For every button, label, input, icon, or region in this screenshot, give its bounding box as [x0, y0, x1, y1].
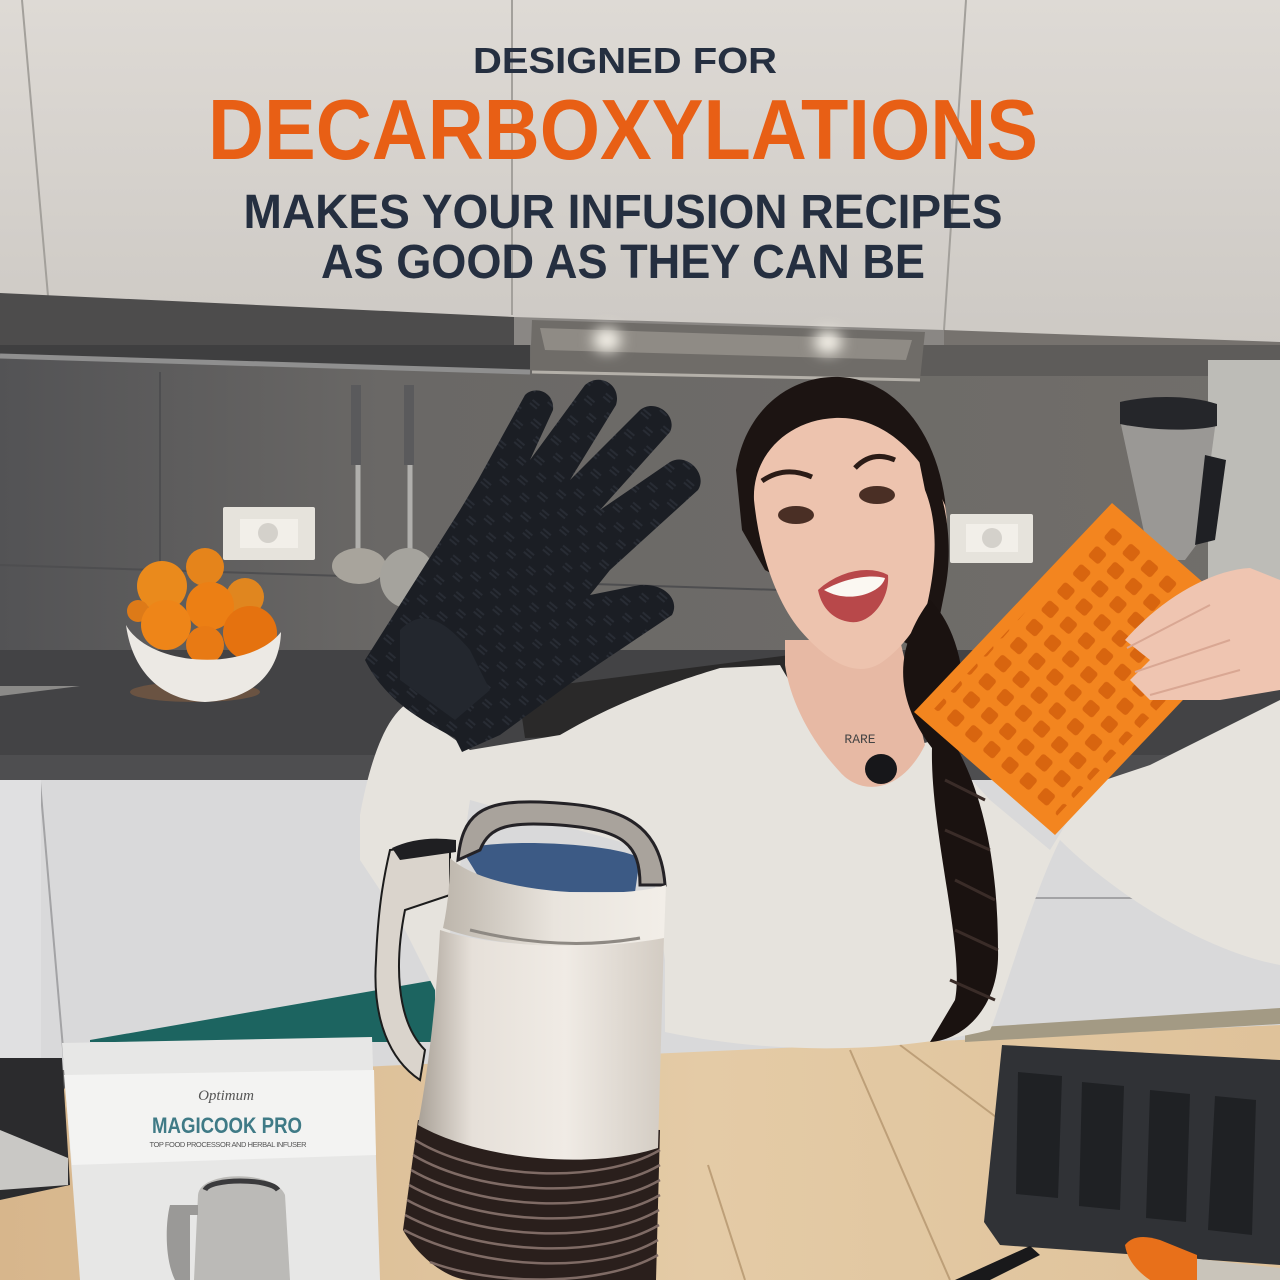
subheading line 1: MAKES YOUR INFUSION RECIPES	[244, 186, 1002, 239]
upper cabinets	[0, 0, 1280, 372]
sockets	[223, 507, 1033, 563]
range hood	[530, 320, 925, 380]
braid	[903, 600, 998, 1042]
box subtitle: TOP FOOD PROCESSOR AND HERBAL INFUSER	[150, 1140, 307, 1149]
icon: bowl of oranges	[126, 548, 281, 702]
side hair	[915, 440, 949, 650]
collar	[443, 858, 666, 946]
lid handle	[458, 802, 665, 885]
green folder	[90, 980, 435, 1042]
box product image	[167, 1176, 290, 1280]
handle	[375, 842, 450, 1080]
product box	[62, 1037, 380, 1280]
lower cabinets	[0, 780, 1280, 1070]
ribbed base	[403, 1120, 660, 1280]
subheading line 2: AS GOOD AS THEY CAN BE	[321, 236, 925, 289]
neck	[785, 640, 925, 787]
blender	[1120, 397, 1226, 560]
black pad	[0, 1058, 70, 1200]
body	[418, 930, 664, 1160]
woman	[360, 377, 1280, 1048]
magicook pro jug	[375, 802, 666, 1280]
countertop	[0, 650, 1280, 780]
hair back	[736, 377, 946, 650]
tattoo: RARE	[844, 732, 876, 747]
orange silicone mold	[914, 503, 1280, 835]
hanging utensils	[332, 385, 436, 608]
heading: decarboxylations: DECARBOXYLATIONS	[208, 83, 1038, 178]
heading: designed for: DESIGNED FOR	[473, 40, 777, 81]
base ribs	[404, 1140, 660, 1280]
eyes and brows	[762, 456, 895, 481]
black bar mold	[984, 1045, 1280, 1265]
icon: microphone	[865, 754, 897, 784]
braid strands	[945, 780, 998, 1000]
face	[754, 418, 947, 669]
box title: MAGICOOK PRO	[152, 1113, 302, 1138]
box logo: Optimum	[198, 1088, 254, 1104]
orange dropper and knife	[955, 1237, 1280, 1280]
smile	[818, 570, 888, 622]
hand	[1125, 568, 1280, 700]
tiled wall	[0, 345, 1280, 655]
blue foil	[462, 843, 640, 892]
sweater	[360, 665, 1280, 1048]
wooden table	[0, 1025, 1280, 1280]
icon: black silicone glove	[365, 380, 701, 752]
